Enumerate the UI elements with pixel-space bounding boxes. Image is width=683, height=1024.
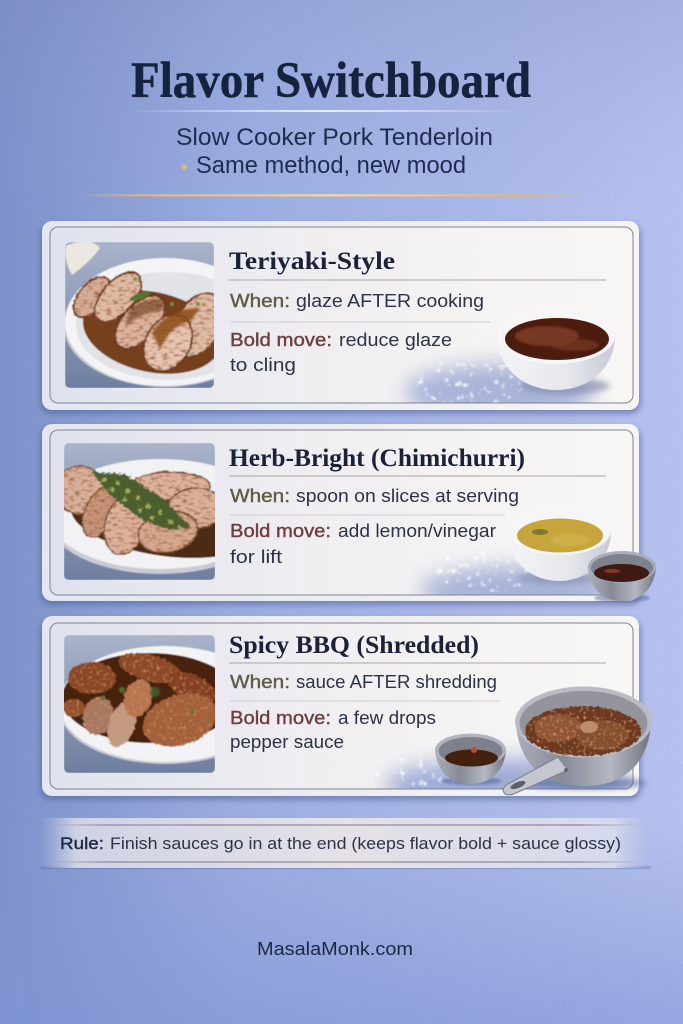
when line: When:	[230, 291, 290, 311]
bold move	[230, 521, 496, 567]
bold move: pepper sauce	[230, 732, 344, 752]
photo: chimichurri pork	[64, 443, 215, 580]
heading: Teriyaki-Style	[229, 248, 395, 275]
bold move	[230, 708, 436, 752]
bold move: reduce glaze	[339, 330, 452, 350]
title: Flavor Switchboard	[131, 53, 531, 109]
subtitle line 1: Slow Cooker Pork Tenderloin	[176, 124, 493, 151]
icon: small steel cup of sauce	[588, 551, 656, 602]
subtitle bullet	[180, 164, 188, 170]
when line: sauce AFTER shredding	[296, 672, 497, 692]
panel: spicy bbq	[40, 616, 652, 811]
bold move: Bold move:	[230, 521, 331, 541]
panel: teriyaki-style	[40, 221, 641, 420]
icon: steel pan of shredded pork	[503, 686, 652, 795]
rule text: Finish sauces go in at the end (keeps flavor bold + sauce glossy)	[110, 834, 621, 853]
when line: glaze AFTER cooking	[296, 291, 484, 311]
photo: teriyaki pork	[65, 242, 214, 388]
when line	[230, 291, 484, 311]
bold move: to cling	[230, 355, 296, 375]
photo: bbq pork	[64, 635, 215, 773]
icon: pan handle	[503, 757, 568, 795]
panel: herb-bright	[40, 424, 656, 614]
icon: bowl of herb sauce	[507, 507, 611, 584]
subtitle line 2: Same method, new mood	[196, 152, 466, 179]
bold move: Bold move:	[230, 330, 332, 350]
callout: rule	[40, 818, 650, 869]
bold move: for lift	[230, 547, 282, 567]
header	[78, 53, 592, 196]
when line: When:	[230, 486, 290, 506]
footer: website: MasalaMonk.com	[257, 939, 413, 959]
icon: bowl of teriyaki glaze	[497, 308, 615, 394]
when line: When:	[230, 672, 290, 692]
heading: Spicy BBQ (Shredded)	[229, 632, 479, 659]
heading: Herb-Bright (Chimichurri)	[229, 445, 525, 472]
bold move: Bold move:	[230, 708, 331, 728]
bold move: a few drops	[338, 708, 436, 728]
when line: spoon on slices at serving	[296, 486, 519, 506]
bold move	[230, 330, 452, 375]
icon: small steel cup of pepper sauce	[435, 734, 506, 785]
rule label: Rule:	[60, 834, 104, 853]
bold move: add lemon/vinegar	[338, 521, 496, 541]
